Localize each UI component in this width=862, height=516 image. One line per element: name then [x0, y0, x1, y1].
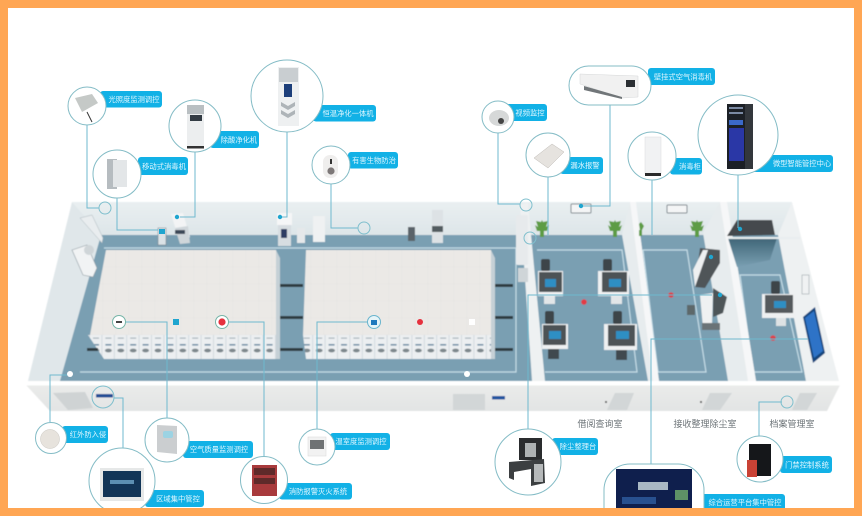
callout: 区域集中管控 — [89, 448, 204, 514]
wall equipment along back wall — [72, 204, 687, 282]
plants — [535, 220, 704, 237]
callout: 红外防入侵: 红外防入侵 — [70, 430, 106, 439]
callout: 空气质量监测调控 — [145, 418, 253, 462]
room 2 furniture — [668, 248, 727, 330]
callout: 门禁控制系统: 门禁控制系统 — [785, 460, 829, 470]
callout: 有害生物防治 — [312, 146, 398, 184]
callout: 除酸净化机: 除酸净化机 — [221, 136, 258, 144]
callout: 光照度监测调控: 光照度监测调控 — [108, 95, 160, 104]
callout: 视频监控 — [482, 101, 547, 133]
back wall — [72, 202, 792, 236]
right wall — [778, 202, 840, 385]
callout: 消毒柜 — [628, 132, 702, 180]
room labels — [577, 418, 815, 429]
callout: 微型智能管控中心 — [698, 95, 833, 175]
callout: 恒温净化一体机 — [251, 60, 376, 132]
callout: 门禁控制系统 — [737, 436, 832, 482]
callout: 壁挂式空气消毒机 — [569, 66, 715, 105]
rack block two — [303, 250, 513, 359]
callout: 综合运营平台集中管控 — [604, 464, 785, 511]
front wall — [26, 381, 840, 411]
rack block one — [87, 250, 303, 359]
partition walls — [520, 202, 756, 381]
callout: 漏水报警 — [526, 133, 603, 177]
callout: 壁挂式空气消毒机: 壁挂式空气消毒机 — [654, 72, 713, 82]
callout: 漏水报警: 漏水报警 — [570, 161, 600, 170]
left wall — [27, 202, 101, 385]
room 1 desks — [538, 259, 637, 360]
callout: 视频监控: 视频监控 — [515, 108, 545, 118]
callout: 除酸净化机 — [169, 100, 259, 152]
callout: 恒温净化一体机: 恒温净化一体机 — [322, 109, 374, 118]
callout: 移动式消毒机 — [93, 150, 188, 198]
marker rings on racks — [67, 316, 475, 377]
room labels: 接收整理除尘室 — [673, 418, 737, 429]
leader lines and markers — [50, 105, 808, 464]
room labels: 档案管理室 — [769, 418, 815, 429]
callout: 消防报警灭火系统 — [240, 456, 352, 504]
callout: 光照度监测调控 — [68, 87, 162, 125]
callout: 微型智能管控中心: 微型智能管控中心 — [773, 159, 832, 168]
room 3 furniture — [727, 220, 825, 363]
callout: 消毒柜: 消毒柜 — [679, 162, 701, 171]
callout: 温室度监测调控 — [299, 429, 390, 465]
callout: 除尘整理台 — [495, 429, 598, 495]
callout: 移动式消毒机: 移动式消毒机 — [142, 162, 187, 171]
callout: 温室度监测调控: 温室度监测调控 — [335, 437, 387, 446]
callout: 空气质量监测调控: 空气质量监测调控 — [190, 445, 249, 454]
callout: 综合运营平台集中管控: 综合运营平台集中管控 — [709, 498, 782, 507]
callout: 红外防入侵 — [36, 422, 108, 454]
callout: 区域集中管控: 区域集中管控 — [156, 494, 201, 504]
callout: 消防报警灭火系统: 消防报警灭火系统 — [289, 487, 347, 496]
floor lines — [80, 248, 802, 372]
floor — [59, 235, 806, 381]
callout: 除尘整理台: 除尘整理台 — [560, 442, 596, 451]
building floor plan — [26, 202, 840, 411]
callout: 有害生物防治: 有害生物防治 — [352, 156, 396, 165]
room labels: 借阅查询室 — [577, 418, 623, 429]
